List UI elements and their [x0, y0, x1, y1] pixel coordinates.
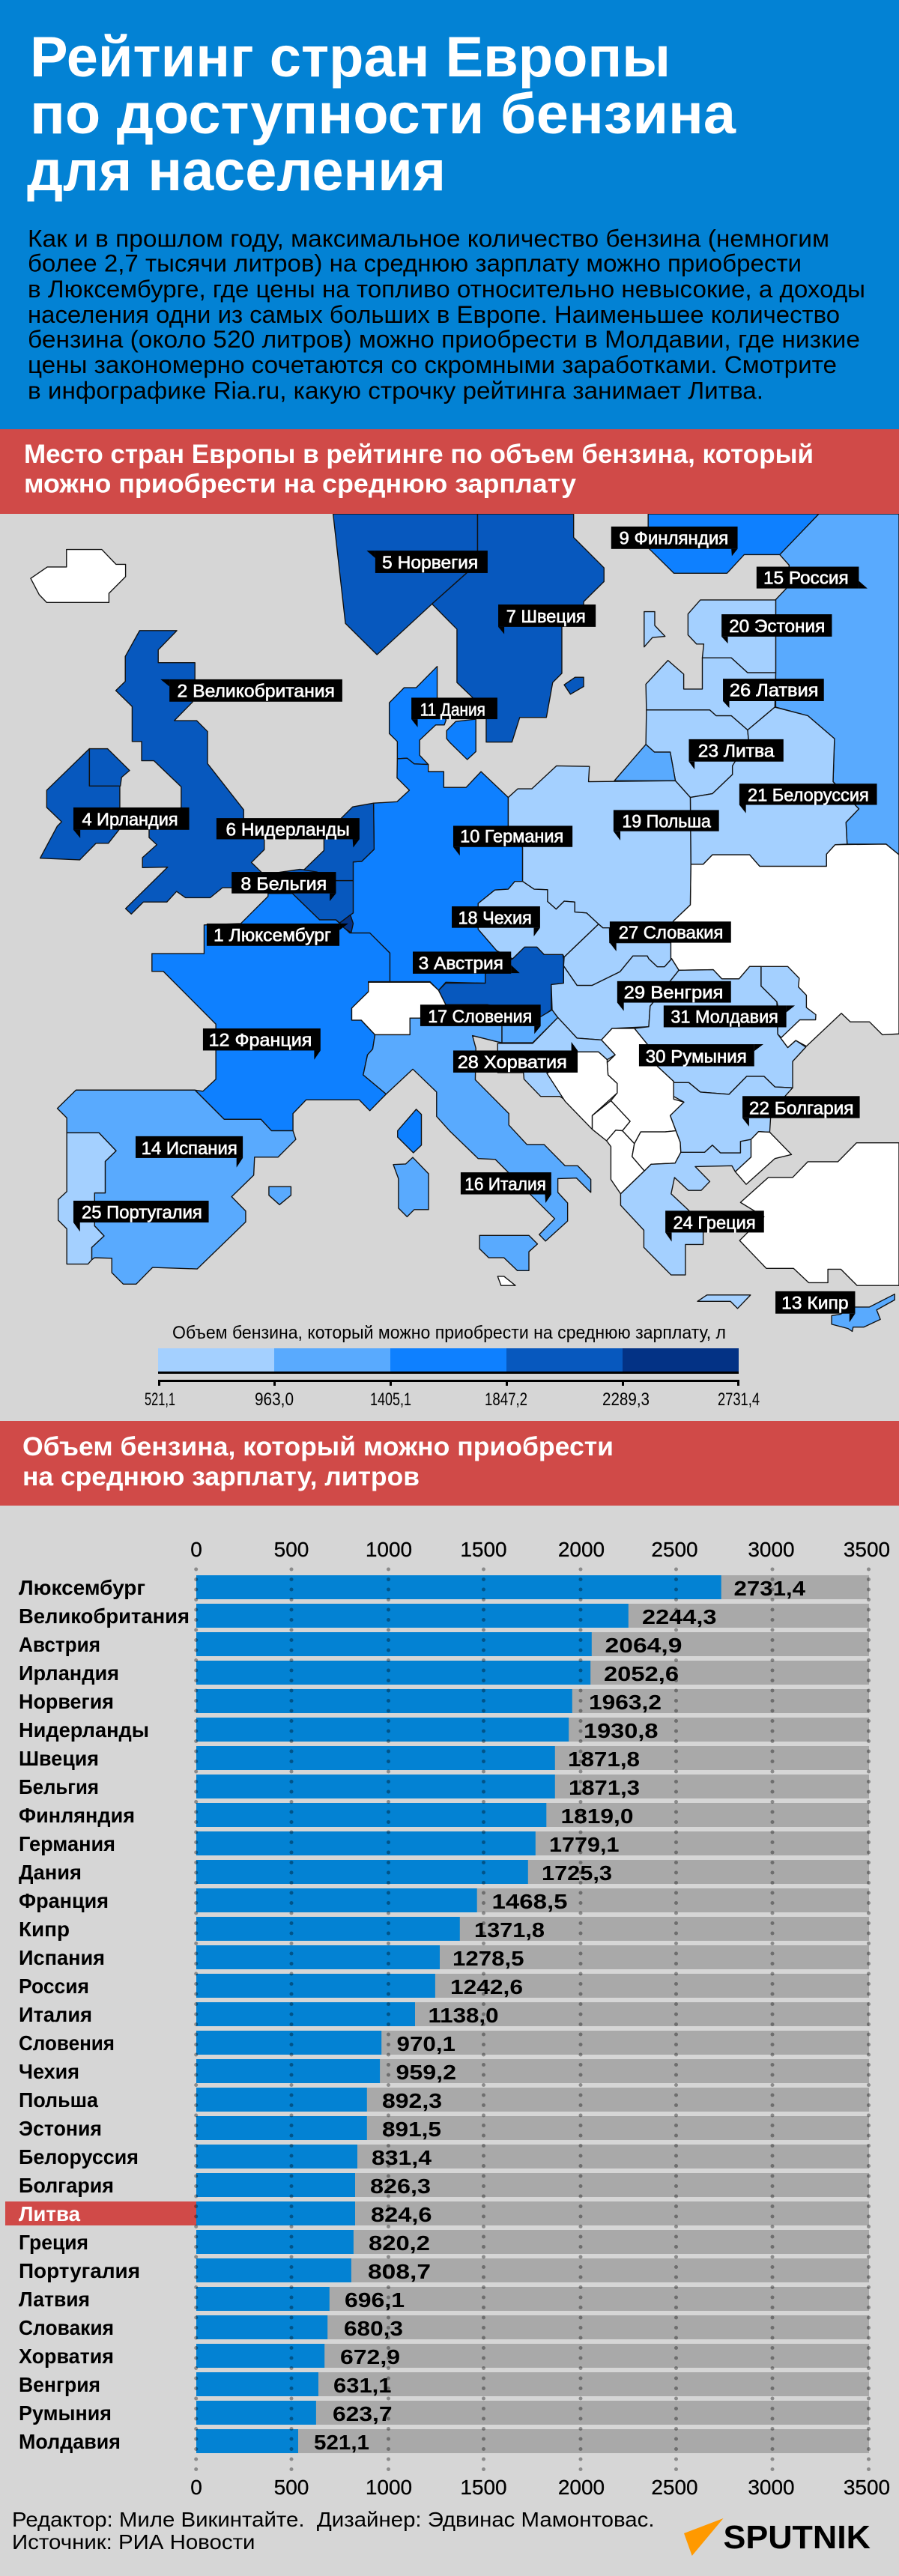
country names: Бельгия: [19, 1775, 99, 1798]
label: 21 Белоруссия: [739, 784, 877, 813]
map countries: [31, 514, 899, 1331]
legend scale: [145, 1380, 760, 1410]
label: 13 Кипр: [775, 1291, 855, 1322]
bar values: 521,1: [314, 2431, 369, 2454]
country names: Кипр: [19, 1918, 70, 1941]
bar values: 696,1: [345, 2288, 405, 2312]
label: 29 Венгрия: 29 Венгрия: [624, 984, 723, 1003]
top axis: 2000: [558, 1538, 605, 1561]
Romania: [635, 966, 806, 1094]
Montenegro: [593, 1100, 630, 1141]
label: 6 Нидерланды: [217, 818, 360, 848]
country names: Финляндия: [19, 1804, 135, 1827]
Bosnia and Herzegovina: [547, 1052, 617, 1130]
Great Britain: [116, 631, 264, 914]
intro text: [28, 225, 865, 404]
label: 9 Финляндия: 9 Финляндия: [620, 530, 728, 549]
highlight: Литва row: [5, 2201, 196, 2225]
bottom axis: 1500: [460, 2476, 507, 2499]
Ireland: [40, 749, 120, 860]
legend scale: 1405,1: [370, 1389, 411, 1410]
label: 19 Польша: [614, 810, 719, 840]
country names: Дания: [19, 1861, 82, 1884]
label: 24 Греция: 24 Греция: [673, 1213, 756, 1233]
Kaliningrad: [614, 745, 676, 781]
label: 22 Болгария: 22 Болгария: [749, 1099, 854, 1118]
Portugal: [58, 1133, 116, 1264]
bar values: 672,9: [340, 2345, 400, 2369]
Turkey, European part: [735, 1132, 791, 1184]
label: 6 Нидерланды: 6 Нидерланды: [226, 820, 350, 840]
label: 23 Литва: 23 Литва: [698, 742, 775, 762]
Hungary: [551, 956, 679, 1040]
bar values: 2244,3: [642, 1605, 716, 1628]
title: Рейтинг стран Европы: [30, 25, 671, 89]
label: 22 Болгария: [742, 1096, 860, 1127]
bar values: 1963,2: [589, 1691, 662, 1714]
legend scale: 2731,4: [718, 1389, 760, 1410]
label: 30 Румыния: [639, 1044, 763, 1067]
label: 5 Норвегия: [366, 551, 488, 573]
country names: Италия: [19, 2003, 92, 2026]
section heading: bar chart: на среднюю зарплату, литров: [22, 1462, 420, 1491]
section heading: bar chart: Объем бензина, который можно приобрести: [22, 1432, 614, 1461]
map legend: [145, 1323, 760, 1410]
credits: Редактор: Миле Викинтайте. Дизайнер: Эдвинас Мамонтовас.: [12, 2508, 655, 2531]
credits: Источник: РИА Новости: [12, 2530, 255, 2554]
label: 26 Латвия: 26 Латвия: [730, 681, 818, 700]
bottom axis: 2000: [558, 2476, 605, 2499]
country names: Люксембург: [19, 1576, 145, 1599]
Moldova: [761, 966, 816, 1037]
legend scale: 521,1: [145, 1389, 175, 1410]
label: 28 Хорватия: [453, 1042, 578, 1073]
bar values: 1819,0: [560, 1804, 634, 1828]
country names: [19, 1576, 190, 2453]
Malta: [497, 1276, 515, 1285]
Poland: [508, 766, 691, 943]
label: 8 Бельгия: 8 Бельгия: [240, 875, 327, 894]
label: 17 Словения: 17 Словения: [428, 1007, 532, 1027]
label: 1 Люксембург: [207, 924, 348, 946]
top axis: 1500: [460, 1538, 507, 1561]
logo: Sputnik: SPUTNIK: [724, 2519, 871, 2556]
country names: Венгрия: [19, 2373, 100, 2396]
Greece: [620, 1139, 751, 1275]
Corsica: [398, 1109, 421, 1153]
bar values: 2064,9: [605, 1634, 682, 1657]
country names: Ирландия: [19, 1661, 119, 1685]
country names: Латвия: [19, 2288, 90, 2311]
top axis: 3000: [748, 1538, 795, 1561]
section heading: map: Место стран Европы в рейтинге по объем бензина, который: [24, 440, 814, 469]
Belarus: [690, 707, 859, 866]
legend title: Объем бензина, который можно приобрести на среднюю зарплату, л: [172, 1323, 726, 1343]
label: 10 Германия: 10 Германия: [460, 828, 563, 847]
label: 18 Чехия: 18 Чехия: [458, 909, 532, 929]
country names: Франция: [19, 1889, 109, 1912]
bottom axis: 3500: [844, 2476, 890, 2499]
top axis: 0: [190, 1538, 202, 1561]
Bulgaria: [671, 1076, 793, 1153]
country names: Испания: [19, 1946, 105, 1969]
intro text: цены закономерно сочетаются со скромными заработками. Смотрите: [28, 351, 837, 378]
Cyprus: [832, 1294, 895, 1331]
label: 27 Словакия: [610, 921, 731, 951]
map of Europe: [31, 514, 899, 1331]
bar values: 824,6: [371, 2203, 432, 2226]
Balearic Islands: [269, 1187, 291, 1204]
top axis: [190, 1538, 890, 1561]
Spain: [58, 1090, 296, 1284]
label: 23 Литва: [689, 739, 784, 769]
bar values: 2731,4: [734, 1577, 805, 1600]
bottom axis: 3000: [748, 2476, 795, 2499]
country names: Белоруссия: [19, 2145, 139, 2169]
bar values: 1725,3: [542, 1861, 612, 1885]
Switzerland: [352, 982, 446, 1034]
Serbia: [602, 1028, 684, 1144]
label: 11 Дания: 11 Дания: [420, 701, 485, 721]
country names: Германия: [19, 1832, 115, 1855]
label: 21 Белоруссия: 21 Белоруссия: [748, 787, 869, 806]
Gotland: [564, 677, 584, 694]
France: [152, 894, 390, 1131]
bottom axis: 0: [190, 2476, 202, 2499]
Denmark, islands: [447, 719, 476, 760]
Slovakia: [563, 924, 672, 986]
label: 2 Великобритания: 2 Великобритания: [177, 682, 335, 702]
bar tracks: [196, 1575, 869, 2453]
bottom axis: 1000: [366, 2476, 412, 2499]
Finland: [648, 514, 819, 573]
Albania: [607, 1130, 644, 1194]
Lithuania: [646, 710, 748, 798]
label: 18 Чехия: [452, 906, 540, 936]
label: 8 Бельгия: [231, 872, 336, 901]
Sicily: [479, 1235, 537, 1270]
label: 28 Хорватия: 28 Хорватия: [458, 1053, 567, 1073]
label: 4 Ирландия: 4 Ирландия: [82, 810, 178, 830]
Latvia: [646, 658, 775, 730]
bar values: 820,2: [369, 2231, 430, 2255]
bar values: 1371,8: [474, 1918, 545, 1942]
bar values: 1468,5: [491, 1890, 568, 1913]
bar values: 892,3: [382, 2089, 442, 2112]
intro text: в инфографике Ria.ru, какую строчку рейтинга занимает Литва.: [28, 378, 763, 404]
bar values: 1138,0: [429, 2004, 499, 2027]
Crete: [697, 1295, 751, 1309]
Netherlands: [304, 803, 374, 881]
label: 14 Испания: 14 Испания: [142, 1139, 237, 1159]
bar chart: [5, 1538, 890, 2499]
label: 9 Финляндия: [611, 527, 738, 556]
country names: Болгария: [19, 2174, 114, 2197]
Estonia: [688, 600, 775, 673]
Belgium: [273, 870, 353, 923]
label: 11 Дания: [411, 697, 497, 727]
bar values: 891,5: [382, 2118, 441, 2141]
bar values: 680,3: [344, 2317, 403, 2340]
bar values: [314, 1577, 805, 2454]
label: 26 Латвия: [723, 679, 824, 708]
label: 30 Румыния: 30 Румыния: [646, 1048, 747, 1067]
bar values: 1871,3: [569, 1776, 640, 1799]
bar values: 1278,5: [452, 1947, 524, 1970]
country names: Россия: [19, 1975, 89, 1998]
bars: [196, 1575, 721, 2453]
label: 16 Италия: [461, 1172, 551, 1203]
label: 3 Австрия: [413, 951, 520, 974]
map labels: [73, 527, 877, 1322]
label: 25 Португалия: [73, 1201, 209, 1231]
label: 31 Молдавия: 31 Молдавия: [671, 1008, 778, 1028]
bar values: 1779,1: [549, 1833, 619, 1856]
bar values: 1930,8: [584, 1719, 658, 1742]
Sardinia: [393, 1157, 429, 1216]
country names: Молдавия: [19, 2430, 121, 2453]
bar values: 808,7: [368, 2260, 431, 2283]
label: 12 Франция: 12 Франция: [209, 1031, 312, 1051]
country names: Польша: [19, 2088, 98, 2112]
bar values: 1242,6: [450, 1975, 523, 1998]
bar values: 623,7: [333, 2402, 393, 2425]
label: 4 Ирландия: [73, 807, 190, 838]
label: 25 Португалия: 25 Португалия: [82, 1204, 202, 1223]
label: 14 Испания: [136, 1136, 243, 1168]
Luxembourg: [339, 915, 353, 933]
top axis: 3500: [844, 1538, 890, 1561]
Denmark, Jutland: [390, 667, 446, 765]
country names: Норвегия: [19, 1690, 114, 1713]
section heading: map: можно приобрести на среднюю зарплату: [24, 469, 577, 499]
label: 20 Эстония: [721, 614, 832, 643]
country names: Швеция: [19, 1747, 99, 1770]
Slovenia: [502, 1010, 558, 1043]
country names: Литва: [19, 2202, 80, 2225]
Norway: [333, 514, 477, 655]
bar values: 1871,8: [568, 1748, 640, 1771]
bar values: 831,4: [372, 2146, 432, 2169]
bottom axis: 2500: [651, 2476, 698, 2499]
label: 15 Россия: [757, 567, 868, 589]
bar values: 2052,6: [604, 1662, 679, 1685]
label: 12 Франция: [203, 1028, 321, 1060]
label: 27 Словакия: 27 Словакия: [619, 924, 723, 943]
top axis: 500: [274, 1538, 309, 1561]
Saaremaa: [644, 612, 665, 647]
legend scale: 2289,3: [602, 1389, 650, 1410]
label: 3 Австрия: 3 Австрия: [419, 954, 503, 974]
section heading: bar chart: [0, 1421, 899, 1506]
title: по доступности бензина: [30, 82, 736, 146]
label: 7 Швеция: 7 Швеция: [506, 607, 586, 627]
country names: Хорватия: [19, 2345, 114, 2368]
label: 7 Швеция: [498, 604, 596, 634]
country names: Австрия: [19, 1633, 100, 1656]
label: 19 Польша: 19 Польша: [622, 813, 712, 832]
bottom axis: [190, 2476, 890, 2499]
intro text: более 2,7 тысячи литров) на среднюю зарплату можно приобрести: [28, 250, 802, 277]
Italy: [363, 1018, 591, 1241]
label: 13 Кипр: 13 Кипр: [781, 1294, 849, 1314]
bar values: 826,3: [370, 2175, 431, 2198]
label: 29 Венгрия: [617, 981, 731, 1011]
label: 10 Германия: [453, 825, 572, 855]
bar values: 970,1: [397, 2032, 455, 2055]
label: 16 Италия: 16 Италия: [464, 1175, 546, 1195]
North Macedonia: [632, 1131, 681, 1171]
bottom axis: 500: [274, 2476, 309, 2499]
country names: Эстония: [19, 2117, 102, 2140]
title: [27, 25, 736, 203]
country names: Словения: [19, 2031, 115, 2055]
Iceland: [31, 550, 126, 602]
country names: Нидерланды: [19, 1718, 149, 1742]
intro text: Как и в прошлом году, максимальное количество бензина (немногим: [28, 225, 829, 252]
bar values: 631,1: [333, 2374, 391, 2397]
label: 5 Норвегия: 5 Норвегия: [382, 554, 478, 573]
label: 24 Греция: [665, 1210, 764, 1242]
label: 15 Россия: 15 Россия: [763, 569, 849, 588]
Czech Republic: [478, 882, 599, 959]
intro text: в Люксембурге, где цены на топливо относительно невысокие, а доходы: [28, 276, 865, 303]
top axis: 1000: [366, 1538, 412, 1561]
intro text: населения одни из самых больших в Европе. Наименьшее количество: [28, 301, 840, 328]
label: 1 Люксембург: 1 Люксембург: [214, 927, 331, 946]
label: 20 Эстония: 20 Эстония: [729, 617, 825, 637]
country names: Чехия: [19, 2060, 79, 2083]
Ukraine: [671, 844, 899, 1048]
section heading: map: [0, 429, 899, 514]
credits: [12, 2508, 655, 2554]
country names: Великобритания: [19, 1604, 190, 1628]
label: 17 Словения: [420, 1004, 541, 1034]
country names: Румыния: [19, 2401, 112, 2425]
legend scale: 963,0: [255, 1389, 294, 1410]
Austria: [438, 947, 563, 1018]
bar values: 959,2: [396, 2061, 456, 2084]
Germany: [350, 758, 523, 990]
top axis: 2500: [651, 1538, 698, 1561]
Croatia: [497, 1017, 615, 1099]
country names: Греция: [19, 2231, 88, 2254]
Russia: [775, 514, 899, 855]
title: для населения: [27, 139, 446, 203]
Turkey, Asian part: [739, 1143, 899, 1285]
legend swatches: [158, 1348, 739, 1374]
country names: Словакия: [19, 2316, 114, 2339]
intro text: бензина (около 520 литров) можно приобрести в Молдавии, где низкие: [28, 326, 860, 353]
header panel: [0, 0, 899, 429]
country names: Португалия: [19, 2259, 140, 2282]
Sweden: [432, 514, 604, 742]
Northern Ireland: [89, 749, 130, 786]
legend scale: 1847,2: [485, 1389, 527, 1410]
